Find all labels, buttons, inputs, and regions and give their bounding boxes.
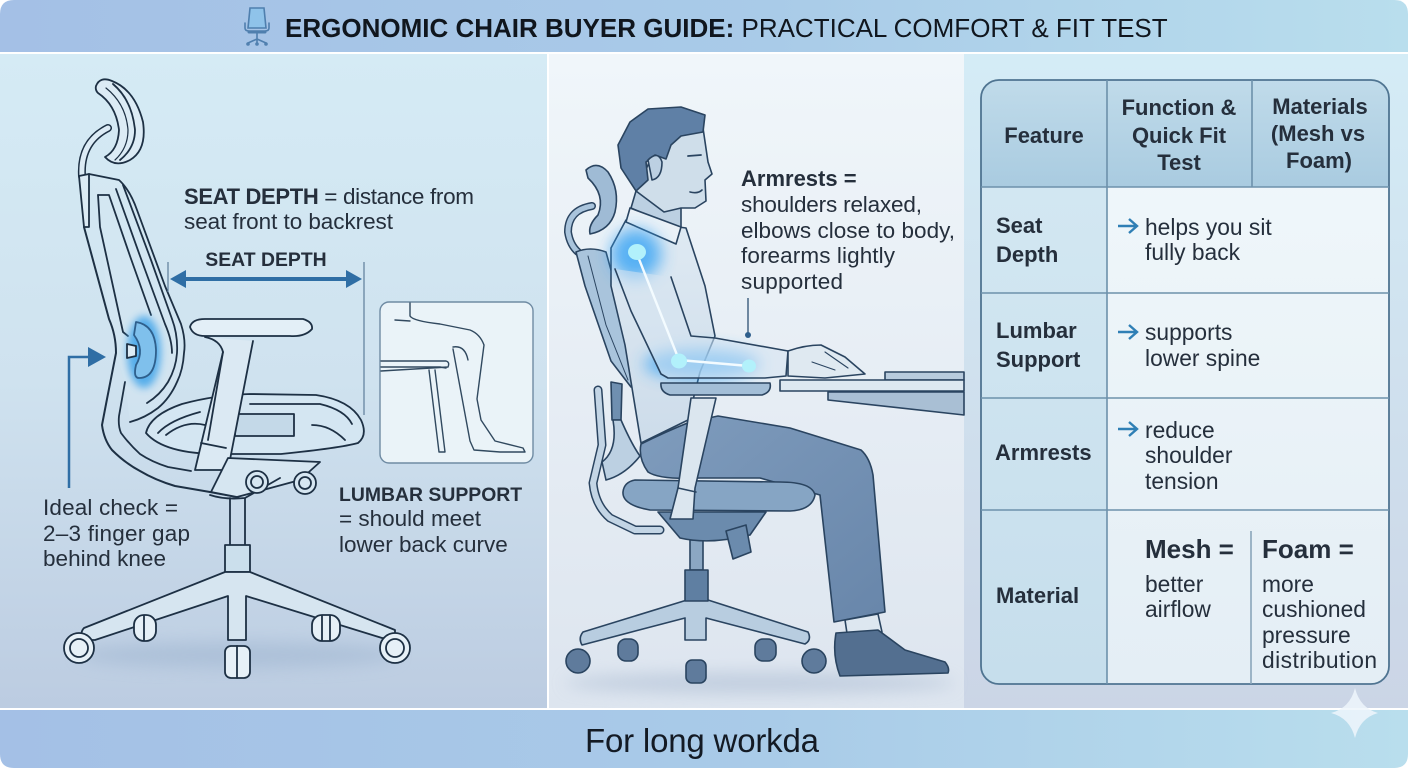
- arm: [615, 269, 788, 378]
- lumbar pad: [127, 316, 161, 388]
- row: armrests: [995, 417, 1233, 494]
- panel: comparison table background: [964, 54, 1408, 708]
- label: lumbar support: = should meet: [339, 506, 482, 531]
- seat: [146, 394, 364, 454]
- label: ideal check: 2–3 finger gap: [43, 521, 190, 546]
- footer text: For long workda: [585, 722, 820, 759]
- mechanism: [211, 458, 320, 497]
- row: seat depth: Depth: [996, 242, 1058, 267]
- arm joint lines and dots: [628, 244, 756, 372]
- table headers: Test: [1157, 150, 1201, 175]
- panel: left chair anatomy background: [0, 54, 547, 708]
- lower back frame: [593, 390, 660, 530]
- label: lumbar support: [339, 484, 522, 557]
- row: material: more: [1262, 571, 1314, 597]
- casters: [64, 615, 410, 678]
- table headers: Materials: [1272, 94, 1368, 119]
- seat: [658, 512, 766, 541]
- row: material: better: [1145, 571, 1204, 597]
- desk: [885, 372, 964, 380]
- inset: knee gap: [380, 302, 533, 463]
- row: lumbar support: Support: [996, 347, 1081, 372]
- table: feature comparison: [981, 80, 1389, 684]
- table headers: [1004, 94, 1368, 175]
- row: material: distribution: [1262, 647, 1377, 673]
- icon: sparkle: [1331, 688, 1378, 738]
- seat depth dimension arrow: [168, 262, 364, 415]
- label: seat depth definition: seat front to backrest: [184, 209, 394, 234]
- floor shadow: [78, 642, 398, 668]
- table cells background: [981, 80, 1389, 684]
- row: seat depth: helps you sit: [1145, 214, 1272, 240]
- row: lumbar support: lower spine: [1145, 345, 1260, 371]
- cushion: [623, 480, 815, 511]
- row: seat depth: Seat: [996, 213, 1043, 238]
- face: [636, 128, 712, 212]
- label: ideal check: Ideal check =: [43, 495, 178, 520]
- floor shadow: [565, 672, 955, 694]
- row: lumbar support: Lumbar: [996, 318, 1077, 343]
- label: armrests: Armrests =: [741, 166, 857, 191]
- label: armrests: [741, 166, 955, 294]
- table headers: (Mesh vs: [1271, 121, 1365, 146]
- backrest: [89, 174, 185, 422]
- table headers: Function &: [1122, 95, 1237, 120]
- row: lumbar support: supports: [1145, 319, 1232, 345]
- table headers: Quick Fit: [1132, 123, 1227, 148]
- row: material: Mesh =: [1145, 534, 1234, 564]
- label: seat depth: SEAT DEPTH: [205, 249, 327, 271]
- armrest: [661, 383, 770, 395]
- row: material: Foam =: [1262, 534, 1354, 564]
- row: lumbar support: [996, 318, 1260, 372]
- row: material: airflow: [1145, 596, 1211, 622]
- sock and shoe: [845, 614, 882, 640]
- row: armrests: Armrests: [995, 440, 1092, 465]
- headrest: [82, 79, 144, 176]
- illustration: chair side view: [64, 79, 410, 678]
- icon: office chair: [245, 8, 269, 45]
- label: armrests: forearms lightly: [741, 243, 896, 268]
- header band: [0, 0, 1408, 52]
- neck: [631, 191, 681, 230]
- gas column: [230, 498, 245, 545]
- row: material: [996, 534, 1377, 673]
- label: ideal check: behind knee: [43, 546, 166, 571]
- chair headrest and back: [586, 165, 616, 234]
- illustration: seated person at desk: [565, 107, 964, 694]
- base and casters: [580, 540, 809, 645]
- label: ideal check: [43, 495, 190, 571]
- row: material: cushioned: [1262, 596, 1366, 622]
- row: seat depth: [996, 213, 1272, 267]
- frame spine: [84, 227, 237, 497]
- row: armrests: reduce: [1145, 417, 1215, 443]
- trousers: [640, 416, 885, 622]
- label: lumbar support: LUMBAR SUPPORT: [339, 484, 522, 506]
- hair: [618, 107, 705, 191]
- footer band: [0, 710, 1408, 768]
- label: armrests: elbows close to body,: [741, 218, 955, 243]
- armrest: [190, 319, 312, 336]
- label: seat depth definition: [184, 184, 474, 234]
- title: ERGONOMIC CHAIR BUYER GUIDE: PRACTICAL COMFORT & FIT TEST: [285, 13, 1168, 43]
- label: armrests: shoulders relaxed,: [741, 192, 922, 217]
- blue joint glow: [611, 229, 760, 379]
- table headers: Feature: [1004, 123, 1084, 148]
- pointer: armrests: [745, 298, 751, 338]
- row: seat depth: fully back: [1145, 239, 1241, 265]
- label: lumbar support: lower back curve: [339, 532, 508, 557]
- five-star base: [81, 572, 395, 640]
- row: material: Material: [996, 583, 1079, 608]
- row: armrests: tension: [1145, 468, 1219, 494]
- table headers: Foam): [1286, 148, 1352, 173]
- panel: seated posture background: [549, 54, 964, 708]
- shirt torso: [611, 220, 715, 443]
- ear and face details: [648, 155, 702, 193]
- label: armrests: supported: [741, 269, 843, 294]
- row: armrests: shoulder: [1145, 442, 1233, 468]
- lumbar pointer arrow: [69, 347, 106, 488]
- label: seat depth definition: SEAT DEPTH = distance from: [184, 184, 474, 209]
- row: material: pressure: [1262, 622, 1351, 648]
